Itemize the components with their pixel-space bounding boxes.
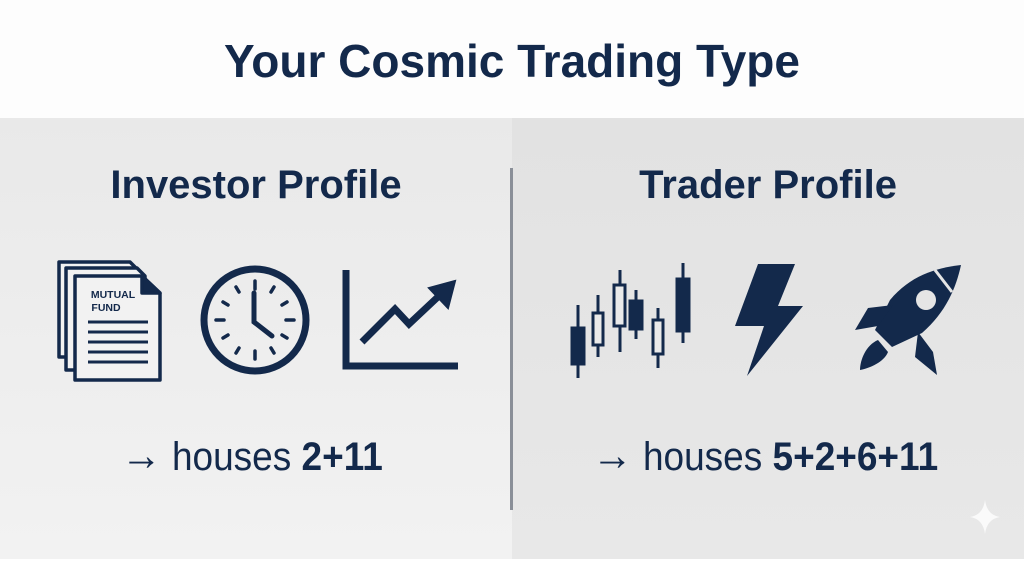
panel: trader background <box>512 118 1024 559</box>
text: trader houses: → houses 5+2+6+11 <box>592 431 938 479</box>
panel: investor background <box>0 118 512 559</box>
icon: rocket <box>855 265 961 375</box>
heading: trader profile: Trader Profile <box>639 163 897 207</box>
title: Your Cosmic Trading Type <box>224 35 800 87</box>
icon: sparkle <box>970 500 1000 534</box>
icon: clock <box>204 269 306 371</box>
icon: mutual fund documents: FUND <box>91 302 121 314</box>
text: investor houses: → houses 2+11 <box>121 431 383 479</box>
icon: mutual fund documents: MUTUAL <box>91 289 136 301</box>
heading: investor profile: Investor Profile <box>110 163 402 207</box>
icon: mutual fund documents <box>59 262 160 380</box>
icon: candlesticks <box>572 263 689 378</box>
icon: lightning bolt <box>735 264 803 376</box>
icon: growth chart <box>346 270 458 366</box>
